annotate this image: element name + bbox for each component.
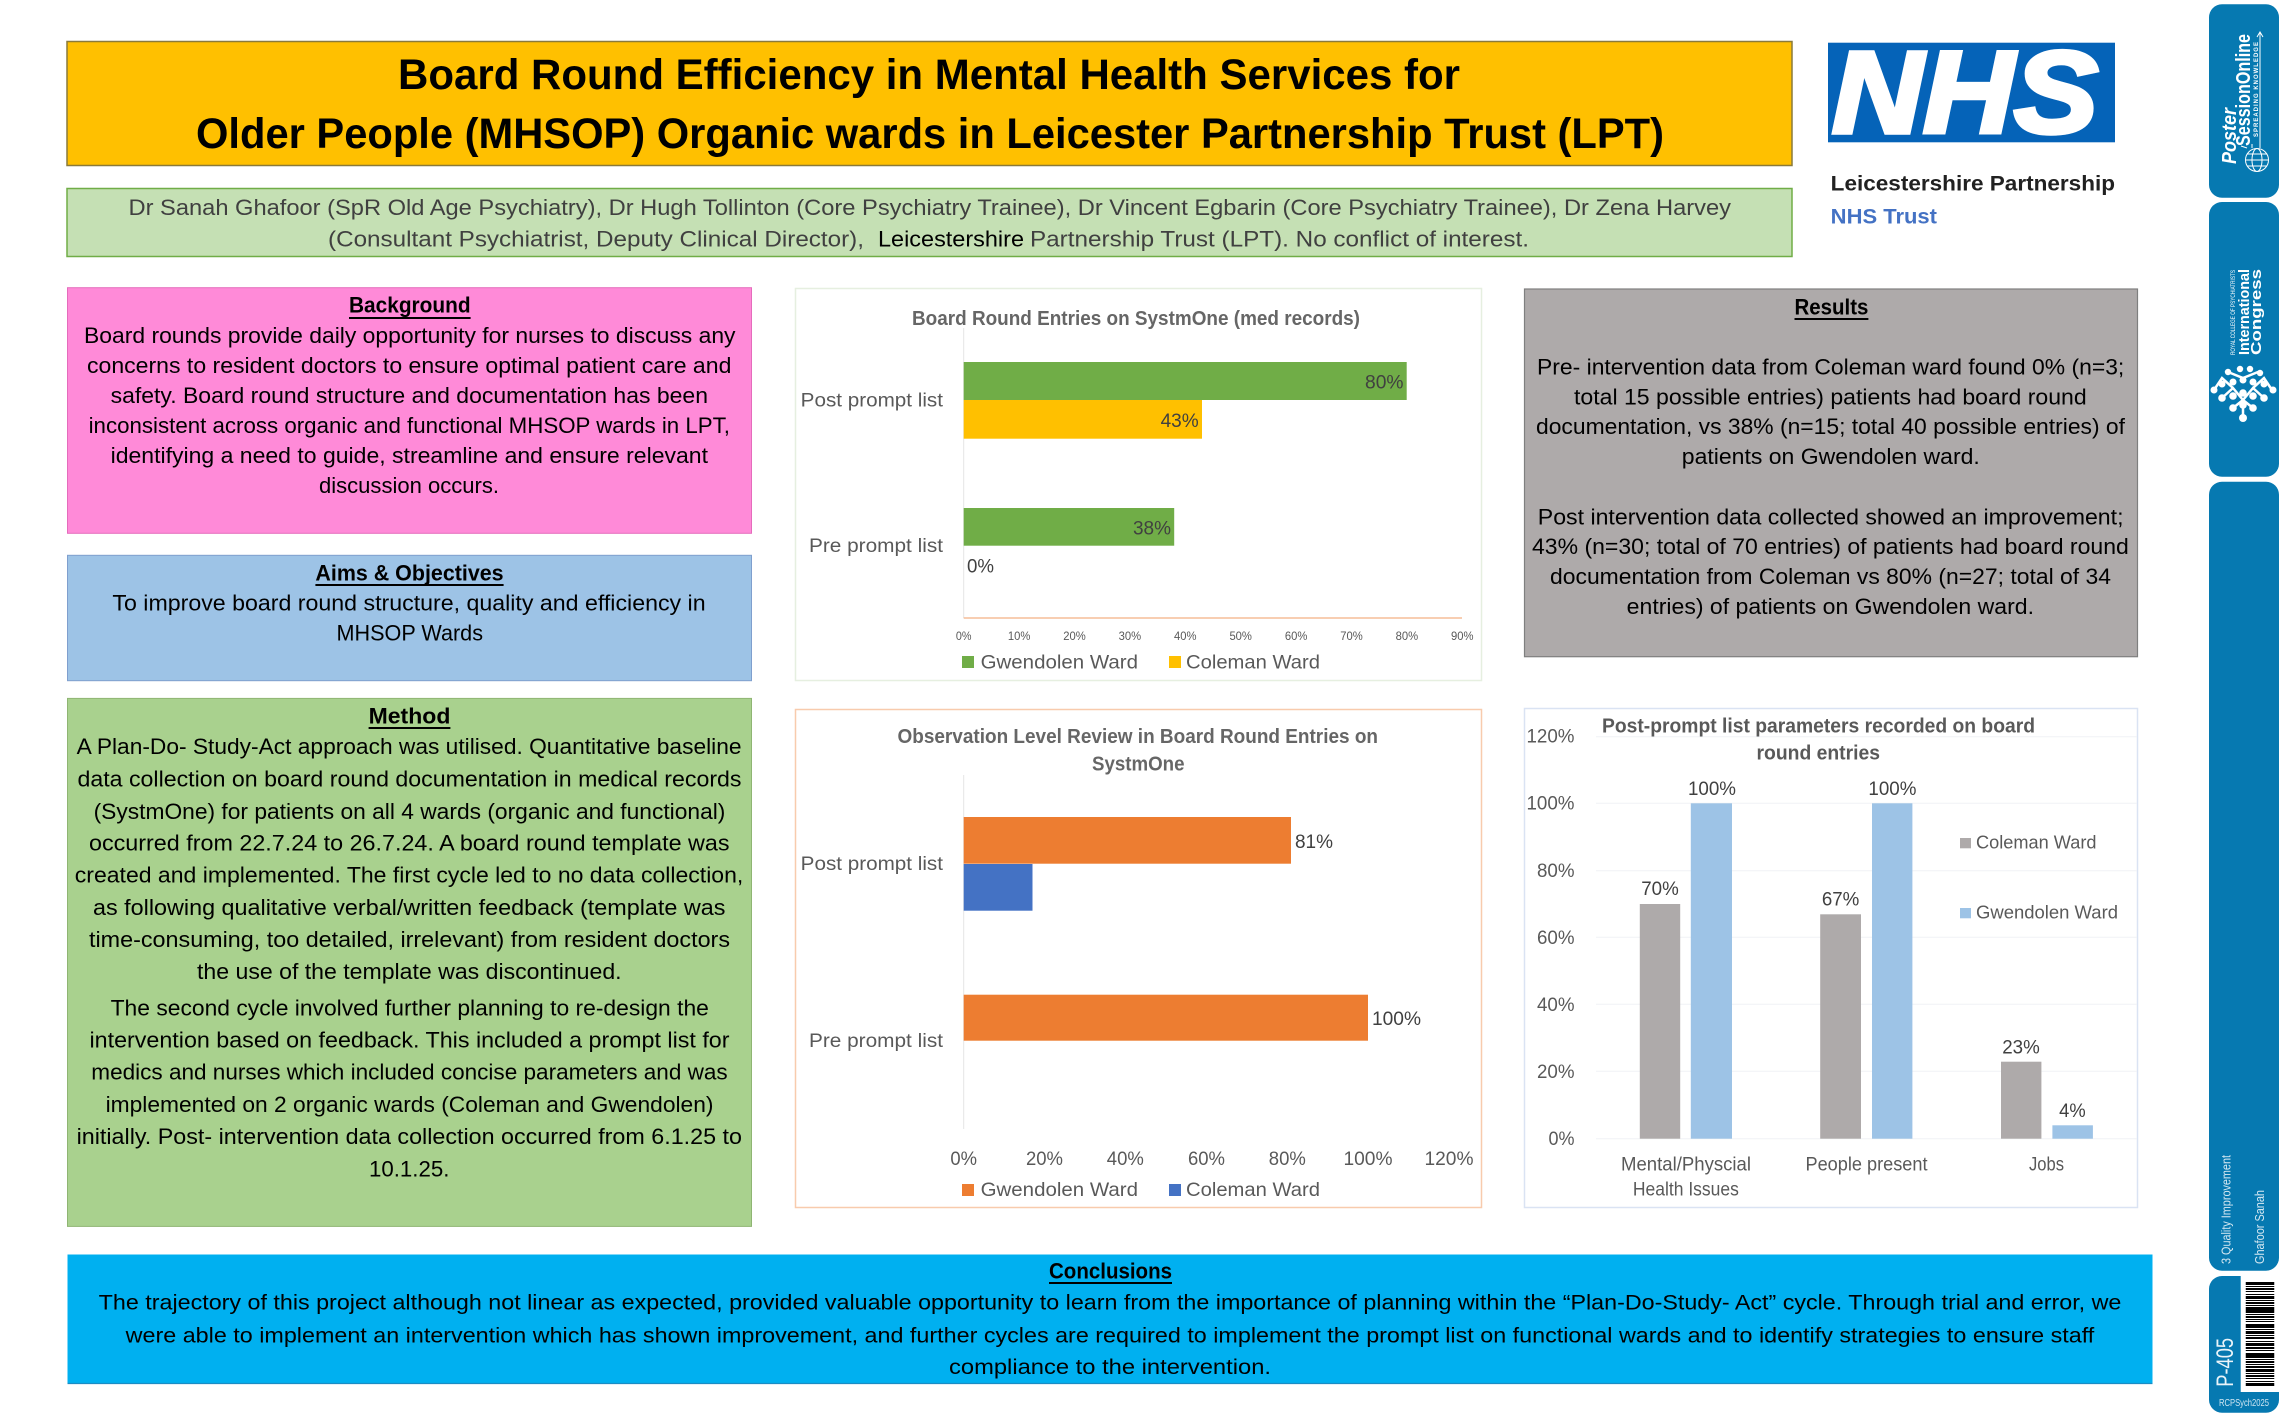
y axis ticks: 100% (1526, 793, 1574, 815)
x axis ticks: 100% (1344, 1148, 1392, 1170)
data labels: 100% (1868, 778, 1916, 800)
text: background body: identifying a need to guide, streamline and ensure relevant (111, 443, 708, 468)
x axis ticks: 60% (1285, 629, 1308, 643)
legend: Gwendolen Ward (981, 651, 1138, 673)
logo wordmark (2219, 34, 2260, 164)
x axis ticks: 30% (1119, 629, 1141, 643)
x axis ticks: 50% (1229, 629, 1252, 643)
category labels: Pre prompt list (809, 535, 944, 557)
category text: 3 Quality Improvement (2219, 1155, 2234, 1264)
text: method body: occurred from 22.7.24 to 26.7.24. A board round template was (89, 831, 730, 856)
bars (964, 817, 1368, 1041)
poster number: P-405 (2212, 1338, 2239, 1387)
chart title: Observation Level Review in Board Round Entries on (898, 726, 1378, 748)
x axis ticks: 60% (1188, 1148, 1225, 1170)
authors: Partnership Trust (LPT). No conflict of interest. (1030, 227, 1529, 252)
sidebar: poster id and barcode (2209, 1276, 2279, 1413)
x axis ticks (950, 1148, 1474, 1170)
data labels: 81% (1295, 831, 1333, 853)
data labels (1641, 778, 2086, 1122)
title (67, 42, 1792, 166)
logo wordmark: Congress (2248, 269, 2265, 355)
trust name: Leicestershire Partnership (1831, 173, 2115, 196)
category labels (1621, 1154, 2064, 1200)
text: method body: The second cycle involved further planning to re-design the (111, 996, 709, 1021)
x axis ticks: 80% (1396, 629, 1418, 643)
logo wordmark: ROYAL COLLEGE OF PSYCHIATRISTS (2230, 270, 2237, 355)
trust name: NHS Trust (1831, 205, 1937, 228)
chart title (1602, 715, 2035, 764)
category labels: Jobs (2029, 1154, 2064, 1176)
text: conclusions body: The trajectory of this project although not linear as expected, provided valuable opportunity to learn from the importance of planning within the “Plan-Do-Study- Act” cycle. Through trial and error, we (99, 1290, 2121, 1314)
logo wordmark: SPREADING KNOWLEDGE (2254, 42, 2260, 137)
data labels: 67% (1822, 889, 1859, 911)
y axis ticks: 120% (1526, 726, 1574, 748)
authors: Leicestershire (878, 227, 1024, 252)
x axis ticks: 80% (1269, 1148, 1306, 1170)
data labels: 4% (2059, 1100, 2086, 1122)
text: method body (75, 734, 743, 1181)
x axis ticks: 40% (1174, 629, 1197, 643)
chart title: Post-prompt list parameters recorded on board (1602, 715, 2035, 737)
data labels: 100% (1688, 778, 1736, 800)
text: results body: patients on Gwendolen ward. (1682, 444, 1980, 469)
category labels (801, 390, 944, 557)
x axis ticks: 20% (1063, 629, 1086, 643)
x axis ticks: 70% (1340, 629, 1363, 643)
data labels: 70% (1641, 878, 1679, 900)
data labels: 43% (1161, 410, 1199, 432)
panel: method (68, 698, 752, 1226)
text: method body: A Plan-Do- Study-Act approach was utilised. Quantitative baseline (77, 734, 742, 759)
category labels: People present (1806, 1154, 1928, 1176)
y axis ticks: 40% (1537, 994, 1574, 1016)
text: method body: intervention based on feedback. This included a prompt list for (90, 1028, 730, 1052)
chart title (898, 726, 1378, 776)
authors: Dr Sanah Ghafoor (SpR Old Age Psychiatry), Dr Hugh Tollinton (Core Psychiatry Trainee), Dr Vincent Egbarin (Core Psychiatry Trainee), Dr Zena Harvey (128, 195, 1731, 220)
text: method body: data collection on board round documentation in medical records (78, 766, 742, 792)
chart: observation level review (796, 710, 1482, 1208)
logo wordmark: International (2236, 269, 2253, 355)
text: method body: created and implemented. The first cycle led to no data collection, (75, 863, 743, 888)
x axis ticks: 0% (950, 1148, 977, 1170)
text: results body: Pre- intervention data from Coleman ward found 0% (n=3; (1537, 354, 2124, 379)
x axis ticks: 120% (1424, 1148, 1474, 1170)
category labels: Health Issues (1633, 1178, 1739, 1200)
logo wordmark: Poster (2219, 107, 2241, 164)
text: background body: concerns to resident doctors to ensure optimal patient care and (87, 353, 731, 378)
text: results body: documentation from Coleman vs 80% (n=27; total of 34 (1550, 564, 2111, 589)
trust name (1831, 173, 2115, 228)
sidebar: poster session online (2209, 4, 2279, 198)
barcode (2246, 1282, 2274, 1387)
text: results body: 43% (n=30; total of 70 entries) of patients had board round (1532, 534, 2129, 559)
panel: results (1524, 289, 2138, 657)
text: method body: initially. Post- intervention data collection occurred from 6.1.25 to (77, 1124, 742, 1149)
data labels: 38% (1133, 518, 1171, 540)
text: background body (84, 323, 736, 498)
y axis ticks: 0% (1548, 1128, 1574, 1150)
icon: neural dome (2210, 366, 2276, 422)
y axis ticks: 60% (1537, 927, 1574, 949)
x axis ticks (956, 629, 1474, 643)
author text: Ghafoor Sanah (2252, 1190, 2267, 1264)
heading: method: Method (369, 703, 450, 728)
x axis ticks: 10% (1008, 629, 1031, 643)
authors (67, 188, 1792, 256)
text: aims body: To improve board round structure, quality and efficiency in (112, 591, 706, 616)
data labels: 23% (2002, 1036, 2040, 1058)
data labels: 100% (1372, 1008, 1421, 1030)
heading: aims: Aims & Objectives (315, 560, 504, 585)
panel: conclusions (68, 1254, 2152, 1384)
x axis ticks: 40% (1107, 1148, 1144, 1170)
y axis ticks (1526, 726, 1574, 1150)
legend (962, 651, 1320, 673)
chart title: SystmOne (1092, 754, 1184, 776)
chart title: round entries (1756, 742, 1880, 764)
text: background body: Board rounds provide daily opportunity for nurses to discuss any (84, 323, 736, 348)
text: results body: total 15 possible entries) patients had board round (1574, 384, 2087, 409)
text: background body: safety. Board round structure and documentation has been (111, 383, 708, 408)
y axis ticks: 20% (1537, 1061, 1574, 1083)
text: results body: Post intervention data collected showed an improvement; (1538, 504, 2124, 529)
NHS logo: NHS (1832, 28, 2098, 158)
category labels: Mental/Physcial (1621, 1154, 1751, 1176)
logo wordmark: SessionOnline (2233, 34, 2255, 146)
legend: Gwendolen Ward (981, 1179, 1138, 1201)
sidebar: international congress (2209, 202, 2279, 477)
text: method body: time-consuming, too detailed, irrelevant) from resident doctors (89, 927, 730, 952)
sidebar: category and author (2209, 482, 2279, 1271)
text: method body: implemented on 2 organic wards (Coleman and Gwendolen) (106, 1092, 714, 1117)
title: Older People (MHSOP) Organic wards in Leicester Partnership Trust (LPT) (196, 110, 1664, 158)
bars (1640, 803, 2093, 1139)
x axis ticks: 0% (956, 629, 972, 643)
legend: Coleman Ward (1976, 832, 2096, 852)
text: background body: discussion occurs. (319, 473, 499, 498)
text: background body: inconsistent across organic and functional MHSOP wards in LPT, (89, 413, 730, 438)
y axis ticks: 80% (1537, 860, 1574, 882)
text: method body: the use of the template was discontinued. (197, 959, 622, 984)
text: method body: as following qualitative verbal/written feedback (template was (93, 895, 725, 920)
text: method body: 10.1.25. (369, 1156, 449, 1181)
x axis ticks: 20% (1026, 1148, 1063, 1170)
heading: results: Results (1794, 294, 1868, 319)
legend: Coleman Ward (1186, 651, 1320, 673)
panel: aims and objectives (68, 555, 752, 681)
text: method body: (SystmOne) for patients on all 4 wards (organic and functional) (94, 799, 725, 824)
data labels (1295, 831, 1421, 1030)
heading: conclusions: Conclusions (1049, 1258, 1172, 1283)
category labels: Post prompt list (801, 853, 944, 875)
heading: background: Background (349, 293, 471, 318)
text: results body: documentation, vs 38% (n=15; total 40 possible entries) of (1536, 414, 2126, 439)
panel: background (68, 288, 752, 533)
legend: Gwendolen Ward (1976, 903, 2118, 923)
text: results body (1532, 354, 2129, 619)
title: Board Round Efficiency in Mental Health Services for (398, 51, 1460, 99)
legend: Coleman Ward (1186, 1179, 1320, 1201)
data labels (967, 372, 1404, 578)
icon: globe and arrow (2241, 32, 2268, 172)
authors: (Consultant Psychiatrist, Deputy Clinical Director), (328, 227, 864, 252)
x axis ticks: 90% (1451, 629, 1474, 643)
text: conclusions body: were able to implement an intervention which has shown improvement, and further cycles are required to implement the prompt list on functional wards and to identify strategies to ensure staff (125, 1324, 2094, 1348)
data labels: 0% (967, 556, 994, 578)
category labels: Pre prompt list (809, 1030, 944, 1052)
chart: post-prompt parameters (1524, 708, 2138, 1208)
text: method body: medics and nurses which included concise parameters and was (91, 1060, 728, 1084)
text: aims body (112, 591, 706, 646)
chart: board round entries (796, 288, 1482, 680)
category labels: Post prompt list (801, 390, 944, 412)
text: conclusions body (99, 1290, 2121, 1379)
logo wordmark (2230, 269, 2265, 355)
category labels (801, 853, 944, 1052)
legend (962, 1179, 1320, 1201)
bars (964, 362, 1407, 546)
data labels: 80% (1365, 372, 1404, 394)
text: results body: entries) of patients on Gwendolen ward. (1627, 594, 2034, 619)
text: aims body: MHSOP Wards (336, 621, 483, 646)
text: conclusions body: compliance to the intervention. (949, 1355, 1271, 1379)
chart title: Board Round Entries on SystmOne (med records) (912, 308, 1360, 330)
legend (1960, 832, 2118, 923)
